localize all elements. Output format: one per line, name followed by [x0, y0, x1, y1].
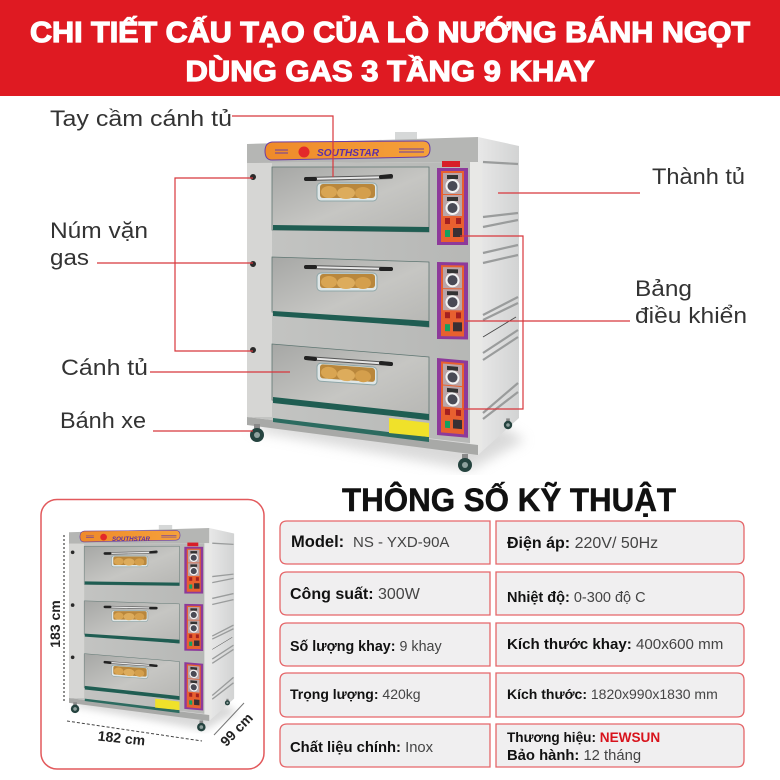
height dimension: 183 cm: [47, 600, 63, 648]
label: thành tủ: Thành tủ: [652, 164, 745, 189]
spec: kích thước: [496, 673, 744, 717]
label: núm vặn gas: Núm vặn: [50, 218, 148, 243]
spec: kích thước khay: [496, 623, 744, 666]
title line 2: DÙNG GAS 3 TẦNG 9 KHAY: [186, 54, 594, 88]
label: cánh tủ: Cánh tủ: [61, 355, 148, 380]
spec: thương hiệu, bảo hành: Thương hiệu: NEWSUN: [507, 730, 660, 745]
spec: kích thước: Kích thước: 1820x990x1830 mm: [507, 686, 718, 702]
depth dimension: 99 cm: [217, 710, 256, 749]
spec: công suất: Công suất: 300W: [290, 586, 421, 603]
spec: kích thước khay: Kích thước khay: 400x600 mm: [507, 636, 723, 653]
width dimension: 182 cm: [97, 728, 146, 748]
spec: điện áp: [496, 521, 744, 564]
spec: điện áp: Điện áp: 220V/ 50Hz: [507, 535, 658, 552]
main oven illustration: [247, 132, 525, 472]
spec: chất liệu: Chất liệu chính: Inox: [290, 740, 434, 756]
spec: công suất: [280, 572, 490, 615]
spec: nhiệt độ: [496, 572, 744, 615]
spec: model: [280, 521, 490, 564]
spec: số lượng khay: [280, 623, 490, 666]
title line 1: CHI TIẾT CẤU TẠO CỦA LÒ NƯỚNG BÁNH NGỌT: [30, 15, 750, 49]
specs heading: THÔNG SỐ KỸ THUẬT: [342, 482, 676, 518]
spec: số lượng khay: Số lượng khay: 9 khay: [290, 639, 442, 655]
spec: trọng lượng: Trọng lượng: 420kg: [290, 686, 421, 702]
panel: dimensions: [41, 500, 264, 769]
spec: trọng lượng: [280, 673, 490, 717]
oven logo text: SOUTHSTAR: [317, 147, 379, 159]
spec: chất liệu: [280, 724, 490, 767]
spec: nhiệt độ: Nhiệt độ: 0-300 độ C: [507, 590, 646, 606]
label: bánh xe: Bánh xe: [60, 408, 146, 433]
specs table: [280, 521, 744, 767]
label: núm vặn gas: [50, 178, 253, 351]
spec: model: NS - YXD-90A: [353, 534, 449, 551]
spec: thương hiệu, bảo hành: [496, 724, 744, 767]
label: tay cầm cánh tủ: [50, 106, 333, 177]
label: bảng điều khiển: Bảng: [635, 276, 692, 301]
label: bảng điều khiển: [460, 236, 747, 409]
small oven logo text: SOUTHSTAR: [112, 536, 150, 543]
label: tay cầm cánh tủ: Tay cầm cánh tủ: [50, 106, 232, 131]
small oven image: [69, 525, 238, 731]
label: núm vặn gas: gas: [50, 245, 89, 270]
header banner: [0, 0, 780, 96]
spec: thương hiệu, bảo hành: Bảo hành: 12 tháng: [507, 748, 641, 764]
spec: model: Model:: [291, 533, 344, 551]
width dimension: [67, 721, 202, 748]
label: bảng điều khiển: điều khiển: [635, 303, 747, 328]
